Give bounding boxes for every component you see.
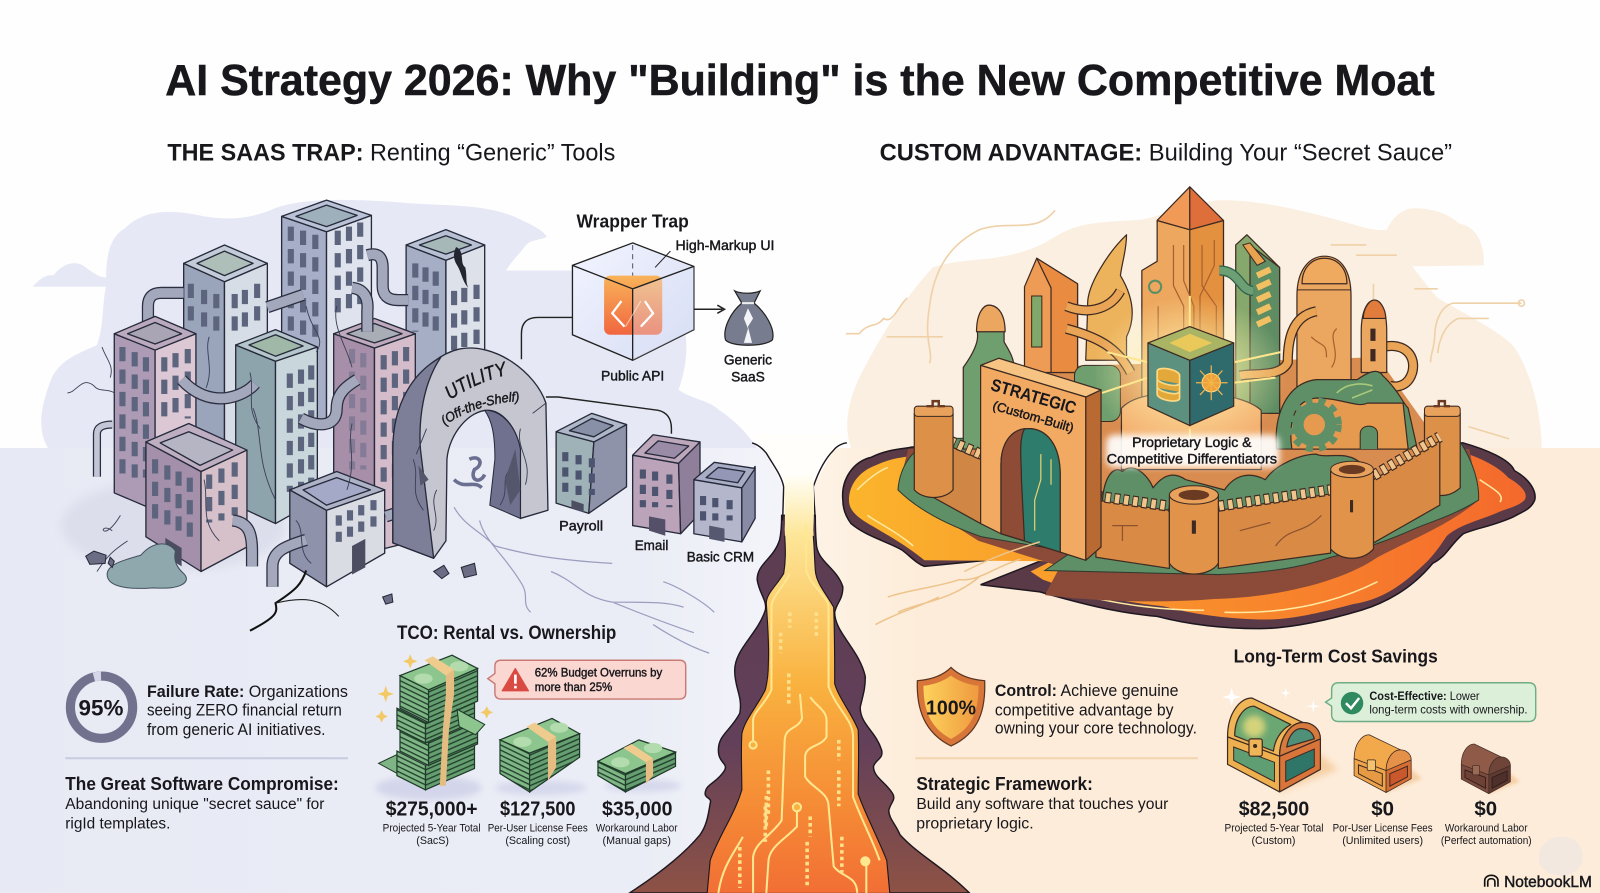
core cube: proprietary logic (1148, 327, 1234, 426)
panel: long-term cost savings (1222, 645, 1536, 847)
glass cube (572, 243, 694, 360)
tower: rocket with handle (1361, 300, 1413, 386)
connector: arch to apps (546, 397, 671, 434)
pedestal wall rear fill (969, 357, 1429, 510)
strategic gate (981, 358, 1101, 560)
tower: curved blade (1086, 235, 1132, 360)
text: control: owning your core technology. (995, 719, 1197, 738)
values: rental: $35,000 (602, 798, 672, 820)
title: AI Strategy 2026: Why "Building" is the New Competitive Moat (165, 56, 1435, 105)
app: email: Email (635, 538, 668, 554)
building: back left (184, 245, 267, 480)
ground crack black (250, 570, 306, 631)
glow rays (1102, 296, 1281, 449)
left wall (933, 434, 981, 524)
text: failure rate: from generic AI initiatives. (147, 720, 326, 739)
values: custom: $0 (1371, 798, 1394, 820)
text: great software compromise: Abandoning unique "secret sauce" for (65, 796, 324, 813)
text: strategic framework (916, 773, 1168, 833)
icon: gear (1290, 400, 1339, 449)
values: custom: $0 (1474, 798, 1497, 820)
ground fissures (454, 507, 714, 653)
app: payroll: Payroll (559, 519, 603, 535)
core glow (1093, 296, 1287, 449)
text: great software compromise: The Great Software Compromise: (65, 773, 339, 794)
text: control: Control: Achieve genuine (995, 681, 1185, 700)
heading: custom advantage: CUSTOM ADVANTAGE: Building Your “Secret Sauce” (880, 139, 1452, 166)
captions: rental: (SacS) (416, 835, 449, 847)
illustration: fortress on lava moat (843, 187, 1535, 629)
donut: 95%: 95% (79, 695, 124, 720)
pipe: into pink tower (352, 288, 368, 332)
heading: the SaaS trap: THE SAAS TRAP: Renting “Generic” Tools (167, 139, 615, 166)
sparkles (376, 654, 493, 723)
icon: small chest (1461, 744, 1520, 794)
captions: custom: (Custom) (1251, 835, 1295, 847)
circuit sketches around castle (846, 210, 1521, 439)
text: strategic framework: Strategic Framework: (916, 773, 1093, 794)
pipe: orange to cube (1240, 311, 1316, 376)
right rear tower (1424, 401, 1460, 495)
pipe: far left (97, 425, 112, 477)
wrapper heading: Wrapper Trap (577, 211, 689, 232)
callout: budget overruns (488, 660, 686, 699)
callout: cost-effective: long-term costs with ownership. (1369, 703, 1528, 716)
heading: TCO: TCO: Rental vs. Ownership (397, 622, 616, 644)
lava moat (849, 451, 1526, 620)
captions: custom: (Perfect automation) (1441, 835, 1532, 847)
gate text: strategic: STRATEGIC (989, 374, 1079, 418)
label: generic SaaS: SaaS (731, 370, 765, 385)
cliff (898, 449, 1479, 601)
tower: spire (1142, 187, 1223, 408)
node dot (1518, 300, 1524, 306)
greenery (1102, 454, 1367, 510)
values: rental: $275,000+ (386, 798, 478, 820)
utility apps (556, 413, 755, 565)
label: generic SaaS: Generic (724, 352, 772, 367)
icon: medium chest (1354, 735, 1422, 792)
tower: green slab (1236, 235, 1280, 413)
app: email (633, 435, 700, 554)
captions: rental: Per-User License Fees (488, 823, 588, 835)
label: proprietary logic (1106, 435, 1280, 467)
label: proprietary logic: Competitive Differentiators (1107, 451, 1277, 466)
captions: custom (1224, 823, 1532, 847)
pipe: green link (1219, 270, 1253, 291)
building: back right cracked (406, 230, 485, 429)
callout: budget overruns: 62% Budget Overruns by (535, 666, 663, 680)
icon: money bag (725, 291, 773, 345)
right front tower (1331, 461, 1373, 558)
lava highlights (857, 467, 1501, 613)
captions: custom: Por-User License Fees (1333, 823, 1433, 835)
captions: rental: Workaround Labor (596, 823, 678, 835)
arch label path (450, 374, 512, 400)
text: failure rate: seeing ZERO financial return (147, 700, 342, 719)
pipes: front (233, 510, 405, 587)
right wall (1373, 437, 1440, 543)
values: rental: $127,500 (500, 798, 576, 820)
shadow under city (61, 480, 286, 572)
brand: NotebookLM: NotebookLM (1504, 874, 1592, 891)
tower: roofed left (1024, 258, 1078, 373)
front wall (1096, 490, 1331, 568)
building: front centre grey (290, 472, 385, 587)
rubble (86, 551, 477, 604)
pipes: back (148, 254, 408, 330)
pipes: middle (182, 380, 357, 424)
app: basic CRM: Basic CRM (687, 549, 754, 565)
pipes: orange links (1066, 291, 1131, 373)
values: custom: $82,500 (1239, 798, 1309, 820)
tower: dome (1297, 256, 1351, 387)
watermark (1539, 837, 1583, 876)
callout: cost-effective: Cost-Effective: Lower (1369, 690, 1482, 703)
captions: custom: (Unlimited users) (1342, 835, 1423, 847)
label: high-markup UI (655, 238, 774, 267)
arch: utility off-the-shelf (392, 347, 549, 559)
leaking puddle (107, 544, 186, 588)
icon: database (1157, 368, 1180, 401)
tower: left green (963, 305, 1120, 449)
panel: failure rate (70, 676, 348, 739)
grass ring (898, 429, 1479, 575)
callout: budget overruns: more than 25% (535, 680, 612, 694)
sparkles (1222, 688, 1320, 713)
icon: shield 100%: 100% (926, 697, 976, 719)
captions: rental: Projected 5-Year Total (383, 823, 481, 835)
connector: arch to wrapper (521, 317, 572, 359)
building: front left pink (146, 424, 247, 572)
icon: sunburst (1196, 365, 1228, 400)
chasm: rock walls (630, 434, 969, 893)
illustration: crumbling SaaS city (61, 200, 714, 653)
app: payroll (556, 413, 627, 535)
building: centre right pink (334, 318, 415, 551)
arch text: off-the-shelf: (Off-the-Shelf) (442, 392, 519, 427)
icon: small money stack (598, 740, 682, 792)
arrow: to generic SaaS (694, 305, 724, 313)
captions: rental (383, 823, 678, 847)
moat outline (843, 443, 1535, 629)
cloud: right (847, 200, 1542, 448)
values: custom (1239, 798, 1497, 820)
values: rental (386, 798, 672, 820)
heading: savings: Long-Term Cost Savings (1234, 645, 1438, 666)
text: strategic framework: Build any software that touches your (916, 796, 1168, 813)
path circuits from gate (876, 542, 1040, 625)
building: left pink (114, 316, 196, 510)
text: failure rate: Failure Rate: Organizations (147, 682, 353, 701)
label: public API: Public API (601, 369, 664, 384)
panel: control (917, 667, 1197, 746)
arch text: utility: UTILITY (445, 361, 506, 398)
captions: custom: Projected 5-Year Total (1224, 823, 1323, 835)
icon: medium money stack (495, 718, 587, 795)
captions: rental: (Scaling cost) (505, 835, 570, 847)
donut: 95% (70, 676, 133, 738)
app: basic CRM (687, 462, 755, 565)
icon: large chest (1228, 698, 1338, 792)
captions: rental: (Manual gaps) (603, 835, 671, 847)
front tower (1169, 486, 1218, 574)
gear building (1276, 371, 1417, 449)
text: control: competitive advantage by (995, 700, 1174, 719)
chasm: lava river with circuit traces (707, 475, 890, 893)
gate text: custom-built: (Custom-Built) (991, 398, 1076, 435)
cloud: left (33, 200, 757, 448)
cracks on city (67, 306, 352, 572)
label: high-markup UI: High-Markup UI (676, 238, 774, 253)
captions: custom: Workaround Labor (1445, 823, 1528, 835)
callout: cost-effective (1326, 683, 1536, 722)
left tower (914, 401, 953, 498)
pedestal (1121, 393, 1261, 469)
panel: TCO rental vs ownership (376, 622, 686, 847)
wrapper trap diagram (572, 211, 774, 385)
icon: large money stack (376, 655, 485, 800)
text: great software compromise (65, 773, 339, 833)
building: centre teal (236, 330, 317, 524)
text: strategic framework: proprietary logic. (916, 816, 1034, 833)
text: great software compromise: rigId templates. (65, 816, 170, 833)
icon: shield 100% (917, 667, 985, 746)
building: back tall (282, 200, 371, 424)
label: proprietary logic: Proprietary Logic & (1132, 435, 1252, 450)
